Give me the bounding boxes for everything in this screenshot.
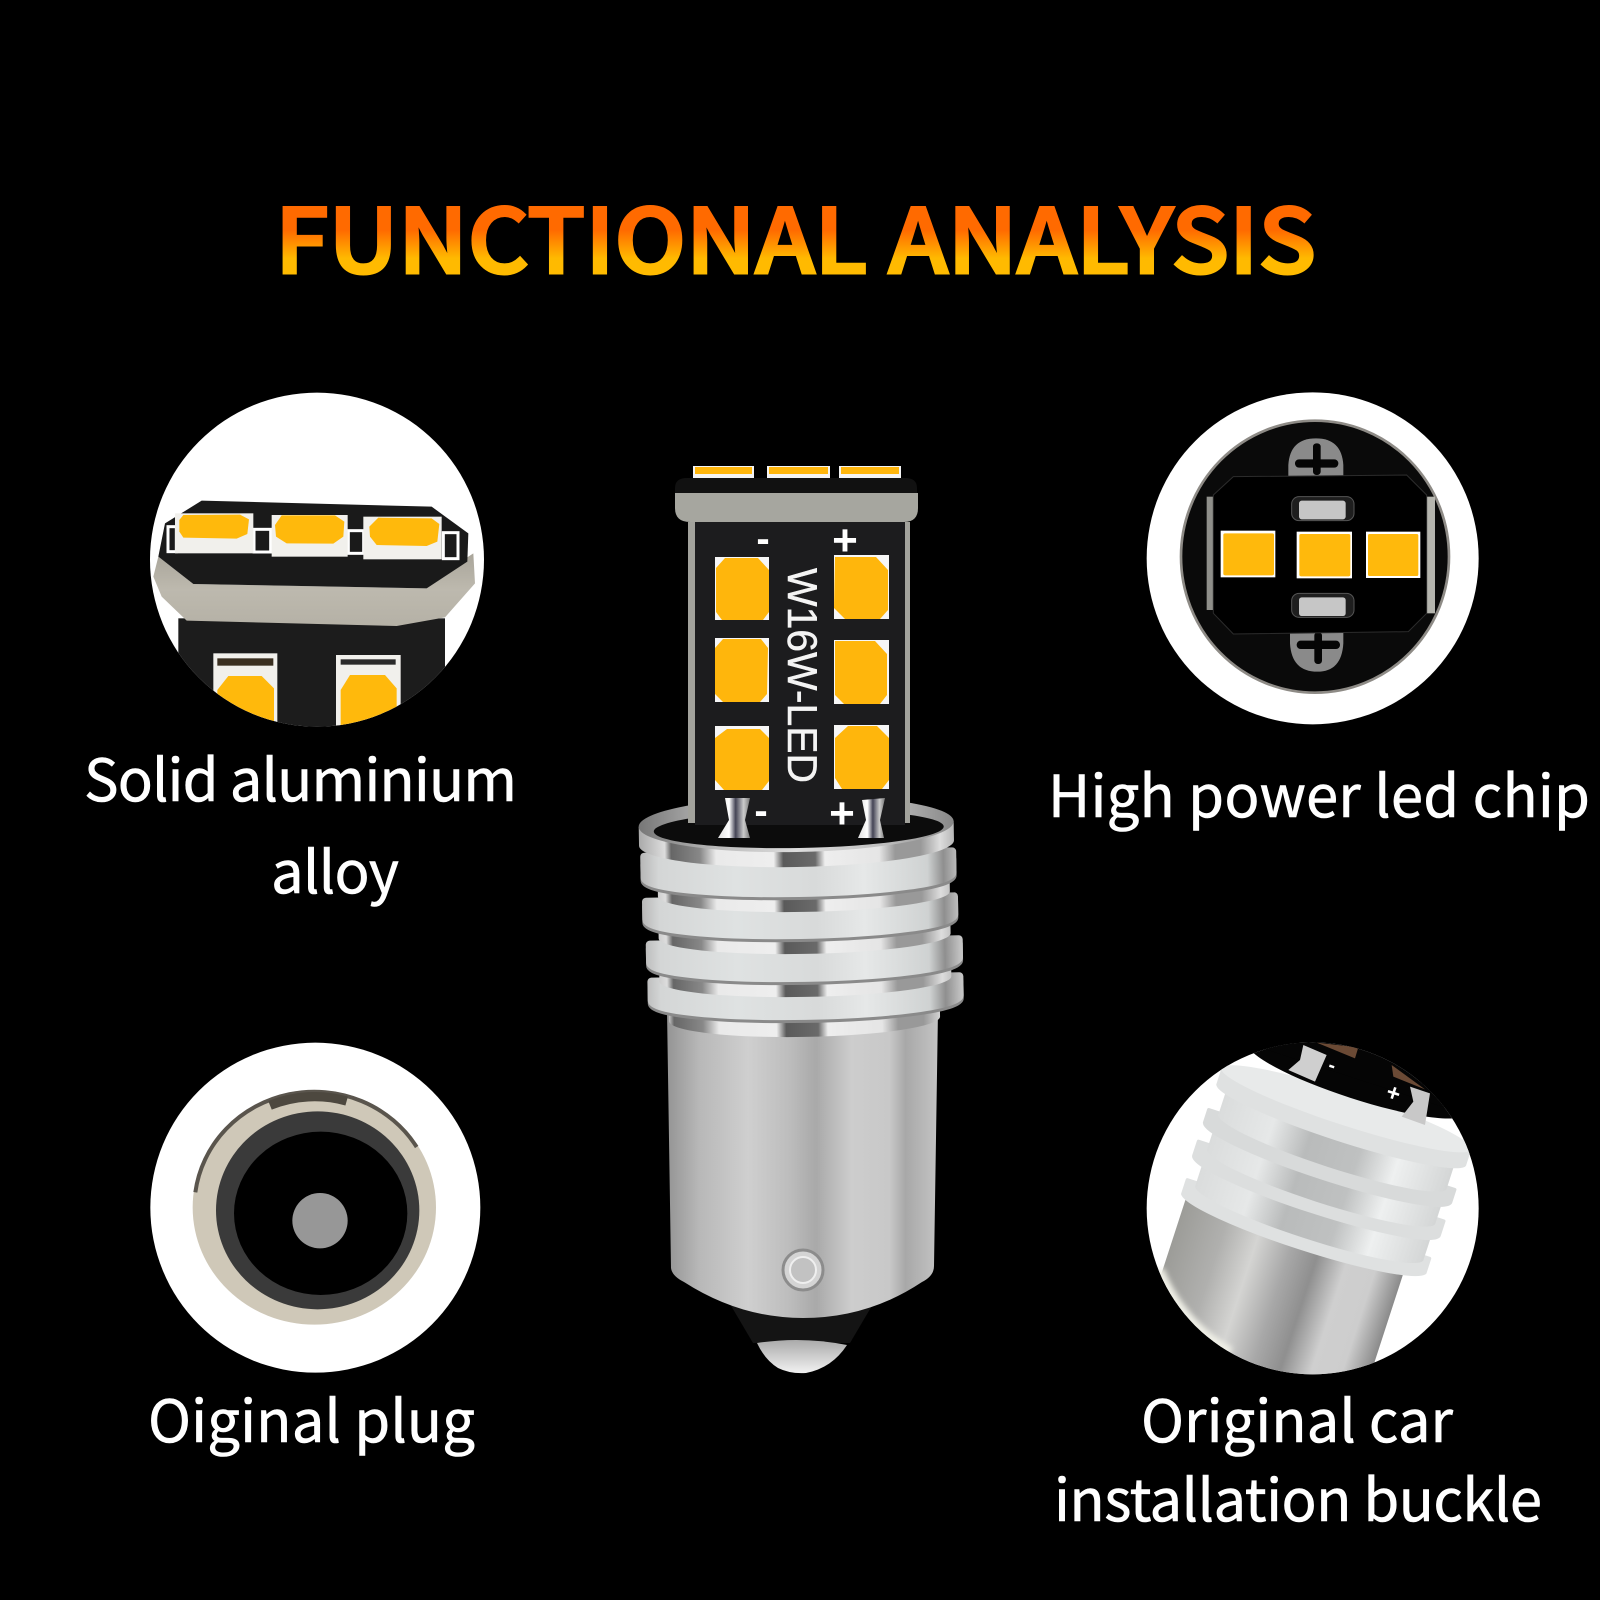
- lamp opening: [1181, 421, 1449, 693]
- lower board: [178, 618, 445, 732]
- central bulb illustration: [638, 466, 960, 1373]
- soft edge highlight on base: [1158, 1270, 1230, 1353]
- label: solid aluminium alloy: [84, 734, 517, 910]
- resistors: [1292, 497, 1354, 617]
- inner plug recess: [216, 1111, 419, 1309]
- label: solid aluminium alloy: alloy: [271, 826, 399, 910]
- polarity marks: -: [754, 789, 768, 833]
- label: high power led chip: High power led chip: [1048, 750, 1590, 834]
- circle: high power LED chip detail: [1146, 392, 1479, 724]
- terminal outlines: [168, 527, 458, 559]
- board model marking: W16W-LED: [779, 568, 826, 783]
- title: FUNCTIONAL ANALYSIS: [275, 170, 1316, 299]
- screw heads: [1288, 438, 1343, 672]
- polarity marks: +: [829, 789, 855, 838]
- top LED chips: [175, 513, 442, 559]
- base locking pin: [783, 1250, 823, 1290]
- side contact strips: [1207, 497, 1435, 613]
- label: original plug: Oiginal plug: [148, 1375, 475, 1459]
- circuit board: [675, 466, 918, 838]
- bulb contact tip: [730, 1304, 873, 1373]
- label: original car installation buckle: [1054, 1375, 1542, 1538]
- board end cap: [675, 478, 918, 522]
- centre contact: [292, 1193, 348, 1248]
- wire clips and polarity marks: -: [1325, 1054, 1339, 1077]
- plug metal rim: [193, 1090, 436, 1325]
- wire clips and polarity marks: [1288, 1043, 1430, 1125]
- circle: original plug detail: [150, 1043, 480, 1373]
- wire clips: [718, 798, 885, 838]
- circle: solid aluminium alloy detail: [150, 392, 484, 727]
- LED chips, left column: [715, 557, 769, 790]
- label: original car installation buckle: Original car: [1141, 1375, 1453, 1459]
- LED chips: [1221, 531, 1420, 578]
- top LED chips: [693, 466, 901, 484]
- polarity marks: [754, 516, 858, 838]
- polarity marks: -: [756, 517, 770, 561]
- aluminium band: [153, 553, 475, 626]
- lower LED chips: [213, 653, 401, 733]
- plug cavity: [234, 1132, 407, 1295]
- board face: [1213, 475, 1427, 634]
- circle: original car installation buckle detail: [1146, 1042, 1479, 1374]
- bulb metal base: [667, 1010, 938, 1318]
- tilted socket and base: [1161, 1042, 1470, 1374]
- polarity marks: +: [832, 516, 858, 565]
- label: original car installation buckle: installation buckle: [1054, 1454, 1542, 1538]
- label: solid aluminium alloy: Solid aluminium: [84, 734, 517, 818]
- finned aluminium socket: [638, 793, 960, 1040]
- rim dark edge: [195, 1092, 417, 1192]
- wire clips and polarity marks: +: [1383, 1078, 1404, 1107]
- black plate: [158, 501, 468, 588]
- LED chips, right column: [834, 555, 889, 789]
